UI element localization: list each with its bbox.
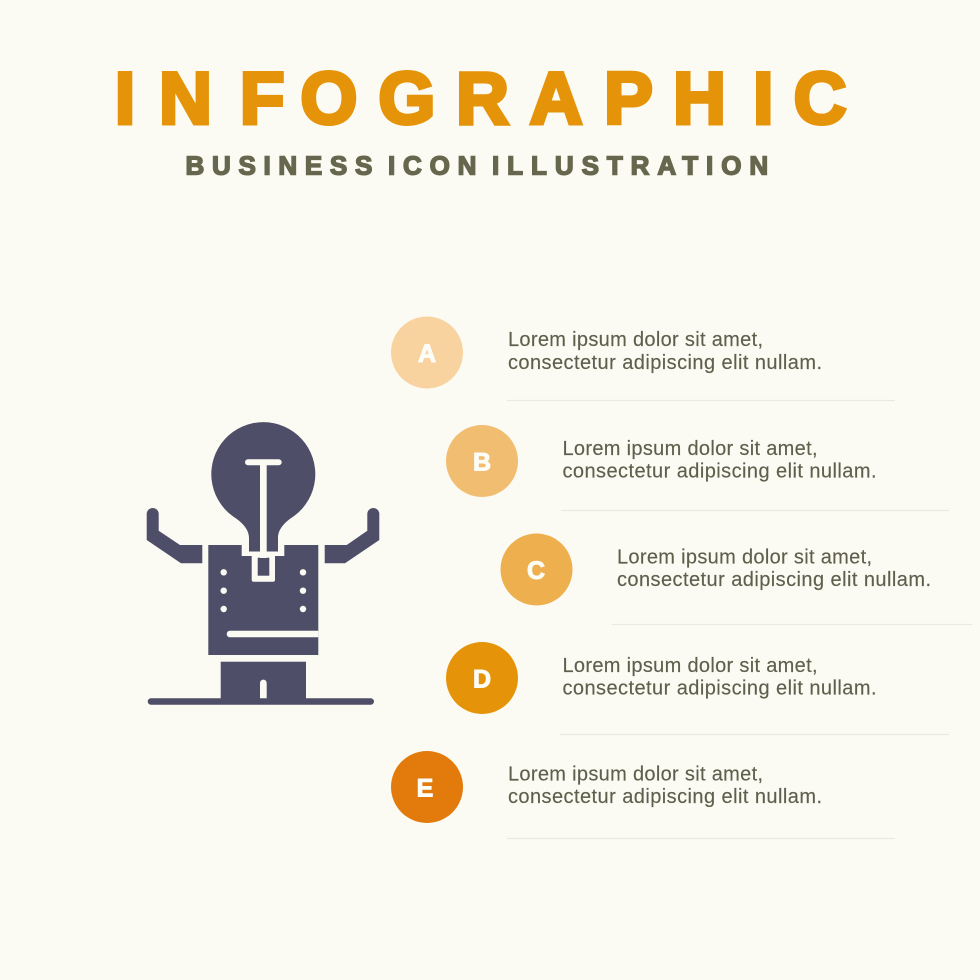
text B xyxy=(562,438,876,482)
ground line xyxy=(148,698,374,705)
text A: Lorem ipsum dolor sit amet, xyxy=(508,329,763,351)
light bulb head xyxy=(211,422,315,558)
icon: person with light bulb head xyxy=(147,422,379,705)
text D xyxy=(562,655,876,700)
text E xyxy=(508,764,822,808)
subtitle xyxy=(186,150,776,180)
badge B: B xyxy=(473,448,491,476)
text E: consectetur adipiscing elit nullam. xyxy=(508,786,822,808)
text C: Lorem ipsum dolor sit amet, xyxy=(617,546,872,568)
title: INFOGRAPHIC xyxy=(115,58,846,140)
subtitle: ICON xyxy=(388,150,484,180)
subtitle: ILLUSTRATION xyxy=(492,150,776,180)
step A xyxy=(391,316,895,400)
text D: consectetur adipiscing elit nullam. xyxy=(562,678,876,700)
badge D xyxy=(446,642,518,714)
step C xyxy=(500,534,972,624)
right arm xyxy=(325,508,379,563)
badge E: E xyxy=(417,774,433,802)
left arm xyxy=(147,508,202,563)
text B: Lorem ipsum dolor sit amet, xyxy=(562,438,818,460)
badge A xyxy=(391,316,463,388)
badge E xyxy=(391,751,463,823)
badge B xyxy=(446,425,518,497)
text A xyxy=(508,329,822,374)
text B: consectetur adipiscing elit nullam. xyxy=(562,460,876,482)
text A: consectetur adipiscing elit nullam. xyxy=(508,352,822,374)
step E xyxy=(391,751,895,838)
badge C xyxy=(500,534,572,606)
badge C: C xyxy=(527,557,545,585)
badge D: D xyxy=(473,666,491,694)
step D xyxy=(446,642,949,734)
subtitle: BUSINESS xyxy=(186,150,380,180)
badge A: A xyxy=(418,340,436,368)
torso xyxy=(208,545,318,655)
text E: Lorem ipsum dolor sit amet, xyxy=(508,764,763,786)
text C: consectetur adipiscing elit nullam. xyxy=(617,569,931,591)
text C xyxy=(617,546,931,591)
legs xyxy=(221,662,306,700)
step B xyxy=(446,425,949,510)
text D: Lorem ipsum dolor sit amet, xyxy=(562,655,818,677)
